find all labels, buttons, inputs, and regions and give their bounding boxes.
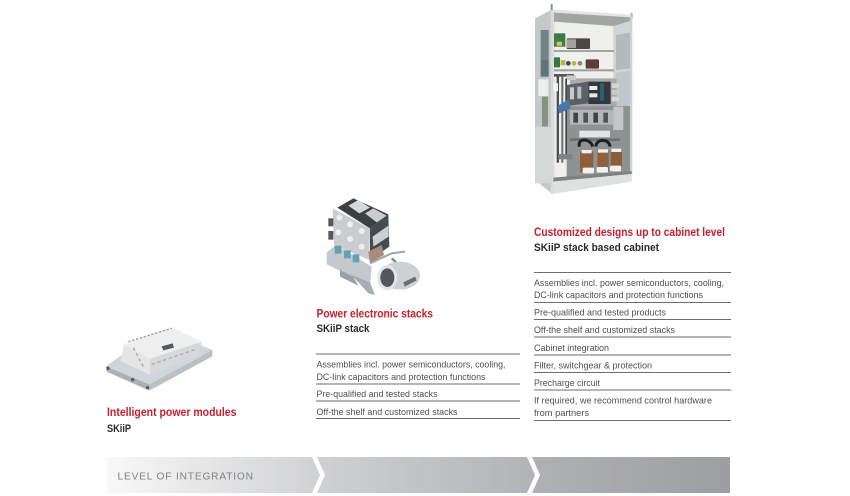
subheading: SKiiP	[107, 423, 131, 435]
feature list	[316, 354, 520, 418]
feature list: Off-the shelf and customized stacks	[316, 407, 458, 417]
feature list: Off-the shelf and customized stacks	[534, 325, 675, 335]
panel: power electronic stacks	[316, 308, 520, 418]
subheading: SKiiP stack	[316, 323, 370, 335]
feature list: Assemblies incl. power semiconductors, cooling,	[534, 278, 724, 288]
feature list: Pre-qualified and tested stacks	[316, 389, 438, 399]
heading: Customized designs up to cabinet level	[534, 227, 725, 239]
base	[327, 245, 372, 285]
feature list: Cabinet integration	[534, 343, 609, 353]
feature list: Pre-qualified and tested products	[534, 308, 666, 318]
feature list: Filter, switchgear & protection	[534, 360, 652, 370]
feature list: If required, we recommend control hardware	[534, 396, 712, 406]
feature list: Assemblies incl. power semiconductors, cooling,	[316, 360, 506, 370]
cabinet rails and components	[553, 33, 623, 173]
heading: Power electronic stacks	[316, 308, 433, 320]
feature list: Precharge circuit	[534, 378, 600, 388]
bar label: LEVEL OF INTEGRATION	[118, 472, 253, 482]
feature list: DC-link capacitors and protection functions	[316, 372, 486, 382]
image: SKiiP stack	[327, 198, 420, 295]
fan	[380, 262, 420, 290]
subheading: SKiiP stack based cabinet	[534, 242, 659, 254]
image: SKiiP module	[106, 327, 212, 391]
feature list: from partners	[534, 408, 589, 418]
arrow segment 3	[532, 457, 730, 493]
feature list: DC-link capacitors and protection functions	[534, 290, 703, 300]
front plate	[333, 208, 370, 260]
arrow segment 1	[107, 457, 320, 493]
heading: Intelligent power modules	[107, 407, 236, 419]
arrow bar: level of integration	[107, 457, 730, 493]
capacitors	[337, 198, 388, 228]
panel: customized designs	[534, 227, 731, 420]
image: cabinet	[535, 4, 633, 194]
arrow segment 2	[317, 457, 535, 493]
panel: intelligent power modules	[107, 407, 236, 435]
feature list	[534, 272, 731, 420]
